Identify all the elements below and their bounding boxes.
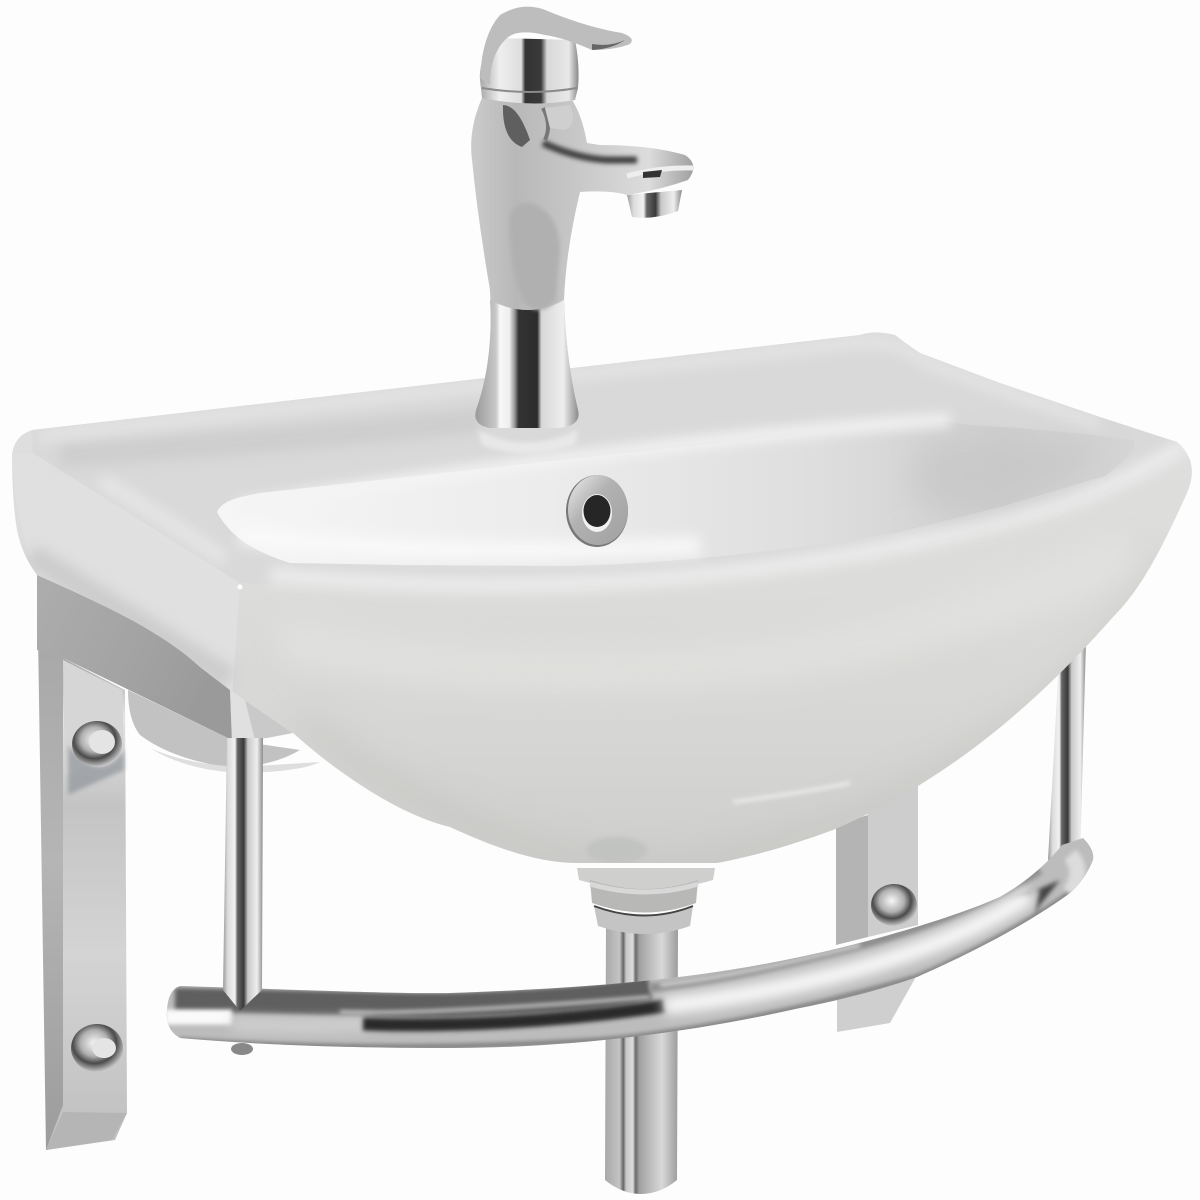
drain flange [577, 868, 715, 934]
left towel bar support [223, 738, 263, 1011]
spout reflections [543, 143, 637, 160]
faucet reflection on rim [479, 432, 576, 452]
basin outer body [0, 320, 1200, 880]
towel bar [160, 830, 1100, 1055]
basin [0, 320, 1200, 880]
faucet [471, 7, 693, 428]
overflow ring [566, 475, 628, 547]
lever handle [480, 7, 632, 85]
glaze glint [238, 584, 242, 590]
left corner side face [38, 575, 236, 691]
body highlight [510, 202, 560, 310]
lower bowl shading [280, 550, 1130, 671]
basin inner bowl [217, 420, 1134, 566]
cap [480, 38, 579, 104]
bracket upper arm under basin [37, 572, 320, 773]
front rim band [270, 445, 1185, 585]
right wall bracket [836, 785, 918, 1032]
lower neck chrome [475, 300, 579, 428]
spout aerator [627, 190, 682, 218]
top bracket screw [72, 721, 122, 767]
basin rim top [32, 332, 1183, 592]
rim soft bands [60, 420, 480, 455]
back wall ridge highlight [291, 412, 952, 490]
left support joint collar [230, 690, 293, 742]
faucet body [471, 98, 693, 428]
right towel bar support [1048, 640, 1086, 860]
towel bar lower fitting [231, 1043, 253, 1055]
inner bowl shading [926, 456, 967, 496]
left wall bracket [37, 570, 127, 1150]
bottom bracket screw [71, 1024, 123, 1072]
drain pipe [605, 925, 678, 1194]
